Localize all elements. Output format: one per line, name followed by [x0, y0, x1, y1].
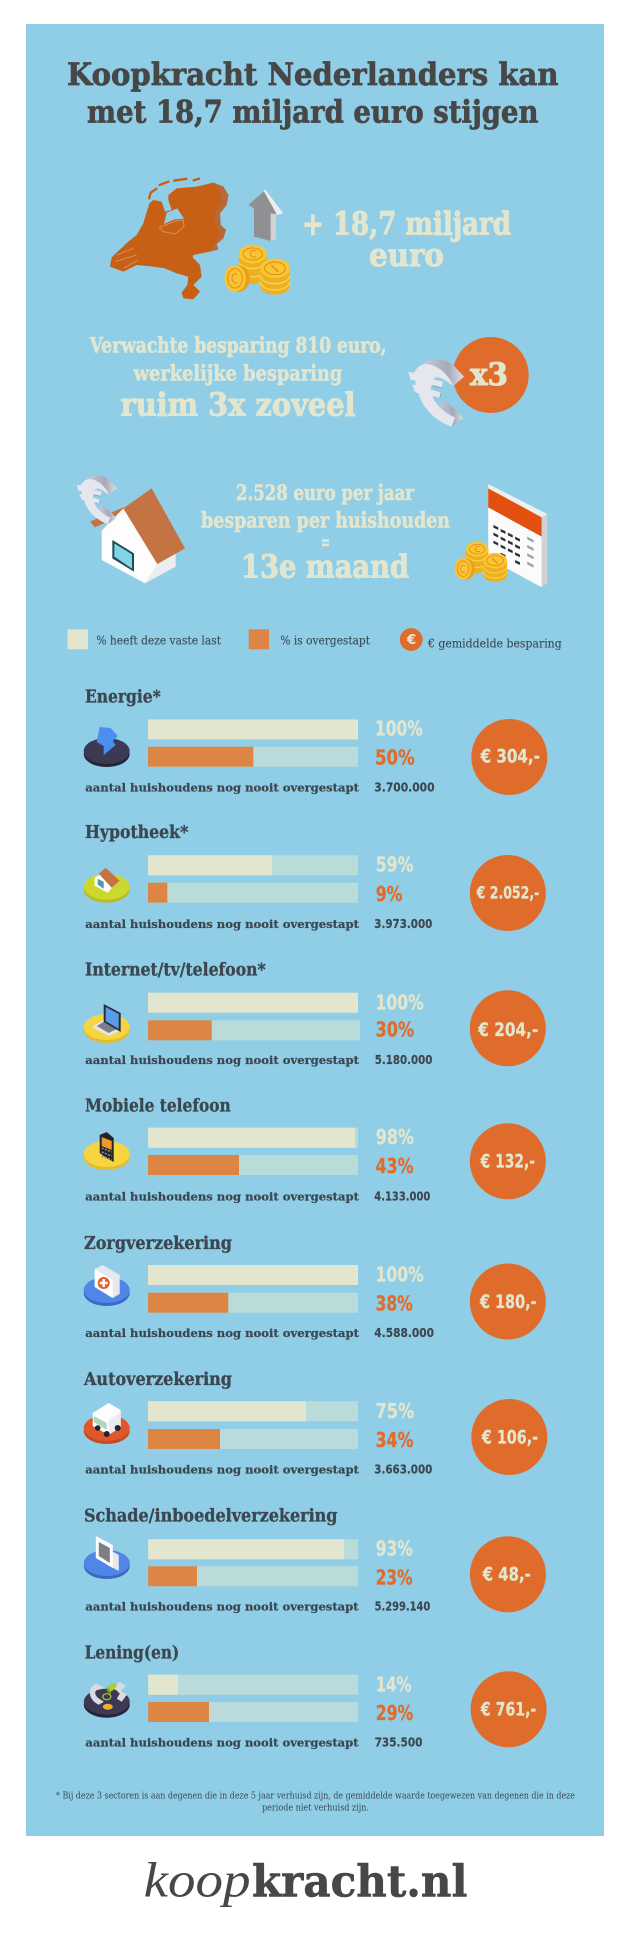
- title: Koopkracht Nederlanders kan: [67, 57, 558, 93]
- legend: €: [406, 633, 416, 648]
- text: 2.528 euro per jaar, 13e maand: besparen per huishouden: [201, 507, 450, 532]
- logo: koopkracht.nl: koop: [144, 1852, 251, 1908]
- panel: Hypotheek: aantal huishoudens nog nooit overgestapt: [85, 917, 360, 931]
- panel: Energie: aantal huishoudens nog nooit overgestapt: [85, 780, 360, 794]
- panel: Energie: 50%: [375, 746, 415, 770]
- panel: Mobiele telefoon: aantal huishoudens nog nooit overgestapt: [85, 1190, 360, 1204]
- panel: Energie: € 304,-: [480, 746, 540, 768]
- panel: Internet/tv/telefoon: € 204,-: [477, 1019, 538, 1041]
- footnote: periode niet verhuisd zijn.: [262, 1803, 369, 1814]
- panel: Lening(en): 29%: [376, 1701, 413, 1725]
- panel: Internet/tv/telefoon: Internet/tv/telefoon*: [85, 961, 266, 981]
- panel: Lening(en): [84, 1643, 547, 1750]
- icon: x3 badge with euro: x3: [470, 357, 508, 393]
- text: 2.528 euro per jaar, 13e maand: 2.528 euro per jaar: [236, 480, 415, 505]
- panel: Zorgverzekering: 100%: [376, 1263, 424, 1287]
- text: 2.528 euro per jaar, 13e maand: =: [321, 530, 330, 554]
- icon: first aid case on platform: [84, 1265, 130, 1306]
- legend: % is overgestapt: [280, 633, 370, 647]
- panel: Zorgverzekering: aantal huishoudens nog nooit overgestapt: [85, 1326, 360, 1340]
- legend: € gemiddelde besparing: [427, 636, 562, 650]
- text: verwachte besparing: [89, 333, 387, 423]
- text: + 18,7 miljard euro: [302, 204, 511, 274]
- text: 2.528 euro per jaar, 13e maand: [201, 480, 450, 585]
- panel: Autoverzekering: 34%: [376, 1428, 414, 1452]
- panel: Zorgverzekering: Zorgverzekering: [84, 1234, 232, 1254]
- legend: % heeft deze vaste last: [96, 633, 221, 647]
- icon: coins: [224, 245, 290, 295]
- panel: Energie: Energie*: [85, 687, 161, 707]
- title: met 18,7 miljard euro stijgen: [87, 94, 538, 130]
- panel: Mobiele telefoon: 43%: [376, 1154, 414, 1178]
- text: 2.528 euro per jaar, 13e maand: 13e maand: [241, 547, 409, 585]
- text: verwachte besparing: ruim 3x zoveel: [120, 385, 356, 423]
- footnote: [56, 1791, 575, 1814]
- icon: up arrow: [248, 189, 283, 241]
- icon: x3 badge with euro: [408, 337, 529, 427]
- panel: Lening(en): 735.500: [375, 1736, 422, 1750]
- panel: Autoverzekering: € 106,-: [481, 1426, 538, 1448]
- panel: Zorgverzekering: € 180,-: [479, 1291, 537, 1313]
- panel: Autoverzekering: 3.663.000: [374, 1462, 432, 1476]
- title: [67, 57, 558, 130]
- panel: Autoverzekering: Autoverzekering: [83, 1370, 232, 1390]
- panel: Zorgverzekering: [84, 1234, 546, 1340]
- panel: Internet/tv/telefoon: 100%: [376, 990, 424, 1014]
- panel: Schade/inboedelverzekering: Schade/inboedelverzekering: [84, 1507, 338, 1527]
- logo: koopkracht.nl: [144, 1852, 468, 1908]
- panel: Hypotheek: Hypotheek*: [85, 823, 188, 843]
- panel: Mobiele telefoon: 98%: [376, 1125, 414, 1149]
- panel: Mobiele telefoon: Mobiele telefoon: [85, 1097, 231, 1117]
- icon: map of the Netherlands: [110, 178, 228, 299]
- text: + 18,7 miljard euro: euro: [369, 236, 444, 274]
- panel: Lening(en): € 761,-: [480, 1699, 536, 1721]
- text: verwachte besparing: Verwachte besparing 810 euro,: [89, 333, 387, 358]
- panel: Autoverzekering: 75%: [376, 1399, 414, 1423]
- panel: Schade/inboedelverzekering: [84, 1507, 546, 1613]
- panel: Zorgverzekering: 4.588.000: [374, 1326, 434, 1340]
- text: + 18,7 miljard euro: + 18,7 miljard: [302, 204, 511, 242]
- panel: Internet/tv/telefoon: 5.180.000: [375, 1053, 432, 1067]
- panel: Schade/inboedelverzekering: € 48,-: [482, 1564, 531, 1586]
- panel: Hypotheek: € 2.052,-: [476, 884, 539, 904]
- panel: Mobiele telefoon: 4.133.000: [374, 1190, 430, 1204]
- panel: Internet/tv/telefoon: 30%: [376, 1018, 414, 1042]
- icon: lightning on platform: [84, 727, 130, 767]
- icon: calendar with coins: [455, 484, 547, 587]
- panel: Mobiele telefoon: € 132,-: [480, 1150, 535, 1172]
- panel: Energie: [84, 687, 547, 795]
- panel: Hypotheek: [84, 823, 546, 931]
- icon: house with euro: [77, 475, 185, 583]
- panel: Lening(en): Lening(en): [85, 1643, 179, 1663]
- icon: van on platform: [84, 1403, 130, 1444]
- icon: phone on platform: [84, 1132, 130, 1170]
- panel: Energie: 100%: [375, 717, 423, 741]
- panel: Autoverzekering: [83, 1370, 547, 1476]
- panel: Hypotheek: 3.973.000: [374, 917, 432, 931]
- panel: Internet/tv/telefoon: aantal huishoudens nog nooit overgestapt: [85, 1053, 360, 1067]
- panel: Schade/inboedelverzekering: 23%: [376, 1566, 412, 1590]
- legend: [68, 628, 562, 651]
- icon: house on platform: [84, 868, 130, 903]
- panel: Schade/inboedelverzekering: 5.299.140: [375, 1599, 430, 1613]
- text: verwachte besparing: werkelijke besparing: [133, 360, 343, 385]
- panel: Hypotheek: 59%: [376, 853, 413, 877]
- icon: documents on platform: [84, 1536, 130, 1579]
- panel: Hypotheek: 9%: [376, 882, 402, 906]
- panel: Mobiele telefoon: [84, 1097, 546, 1204]
- panel: Schade/inboedelverzekering: aantal huishoudens nog nooit overgestapt: [85, 1599, 359, 1613]
- panel: Lening(en): 14%: [376, 1673, 411, 1697]
- panel: Autoverzekering: aantal huishoudens nog nooit overgestapt: [85, 1462, 360, 1476]
- panel: Lening(en): aantal huishoudens nog nooit overgestapt: [85, 1736, 359, 1750]
- icon: money symbols on platform: [84, 1682, 130, 1718]
- icon: laptop on platform: [84, 1004, 130, 1043]
- panel: Zorgverzekering: 38%: [376, 1292, 413, 1316]
- panel: Energie: 3.700.000: [374, 780, 435, 794]
- panel: Schade/inboedelverzekering: 93%: [376, 1537, 413, 1561]
- logo: koopkracht.nl: kracht.nl: [252, 1857, 468, 1908]
- panel: Internet/tv/telefoon: [84, 961, 546, 1067]
